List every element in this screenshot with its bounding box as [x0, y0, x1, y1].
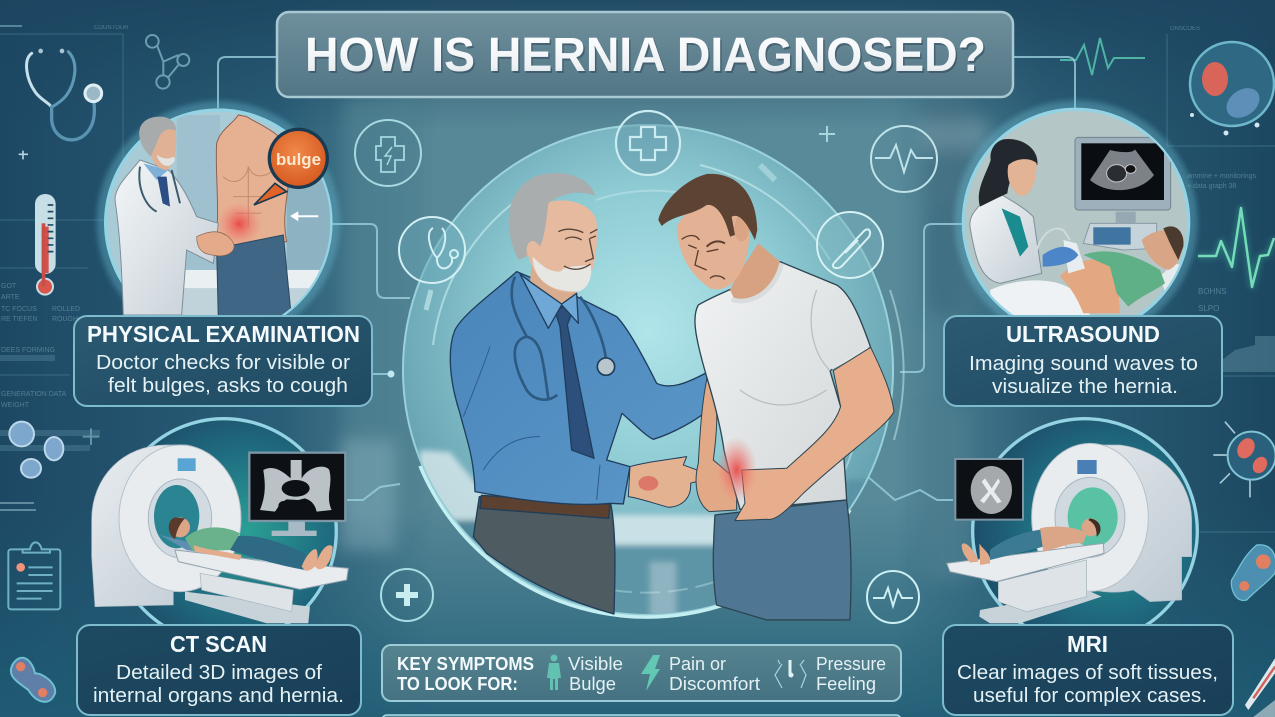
patient	[962, 518, 1101, 565]
patient left arm	[696, 377, 737, 512]
left background data panel: WEIGHT	[1, 402, 30, 409]
panel: mri	[943, 625, 1233, 715]
torso	[216, 115, 289, 247]
left background data panel: DEES FORMING	[1, 347, 55, 354]
left background data panel: COUNTOUR	[94, 25, 129, 31]
icon circle: plus	[381, 569, 433, 621]
sleeve and cuff folds	[463, 347, 600, 500]
patient jeans	[713, 500, 851, 620]
scanner front	[1032, 443, 1148, 591]
monitor	[1075, 137, 1171, 210]
panel: mri: useful for complex cases.	[973, 685, 1207, 707]
icon circle: medical cross with bolt	[355, 120, 421, 186]
panel: mri: Clear images of soft tissues,	[957, 662, 1218, 684]
icon: heartbeat right	[1198, 208, 1274, 287]
left background data panel: ROUGH	[52, 316, 78, 323]
doctor stethoscope	[512, 277, 606, 400]
console	[1083, 223, 1157, 250]
ultrasound circle	[954, 100, 1198, 344]
doctor shirt and tie	[143, 163, 168, 180]
patient figure	[658, 174, 894, 620]
icon: blood cells	[9, 422, 63, 478]
doctor head	[525, 200, 597, 293]
patient face features	[682, 235, 725, 279]
doctor face features	[558, 229, 597, 269]
jeans	[217, 235, 292, 320]
icon: lightning	[641, 655, 660, 691]
small plus marks	[819, 126, 835, 142]
doctor coat	[115, 160, 218, 315]
title banner	[277, 12, 1013, 97]
scanner screen	[1077, 460, 1097, 474]
icon: pressure	[775, 660, 806, 688]
speech bubble	[254, 128, 329, 205]
panel: key symptoms: Visible	[568, 654, 623, 674]
patient abdomen	[1060, 259, 1120, 313]
icon: bacterium right	[1231, 545, 1275, 601]
arrow	[290, 211, 318, 221]
central circular illustration	[355, 111, 937, 623]
physical examination circle	[97, 101, 340, 344]
panel: ultrasound: Imaging sound waves to	[969, 353, 1198, 375]
doctor beard	[533, 257, 591, 292]
icon circle: medical cross	[616, 111, 680, 175]
doctor hand	[197, 232, 234, 256]
right background data panel: ammine + monitorings	[1187, 173, 1257, 180]
nurse coat	[970, 192, 1042, 283]
doctor neck	[530, 263, 577, 305]
panel: ct scan: Detailed 3D images of	[116, 662, 322, 684]
icon circle: thermometer	[817, 212, 883, 278]
doctor hair	[509, 173, 595, 260]
left background data panel: TC FOCUS	[1, 306, 37, 313]
doctor tie	[555, 307, 594, 458]
panel: key symptoms: KEY SYMPTOMS	[397, 654, 534, 674]
left background data panel: ROLLED	[52, 306, 80, 313]
connector dot	[388, 370, 394, 378]
icon: plus lower left	[83, 428, 99, 445]
left background data panel: GOT	[1, 283, 17, 290]
connector lines	[218, 57, 1075, 500]
doctor collar	[520, 274, 578, 328]
panel: key symptoms: Bulge	[569, 674, 616, 694]
title banner: HOW IS HERNIA DIAGNOSED?	[305, 29, 986, 82]
patient head	[677, 200, 749, 289]
icon: thermometer lower right	[1245, 658, 1275, 717]
panel: key symptoms: Discomfort	[669, 674, 760, 694]
panel: ultrasound: ULTRASOUND	[1006, 321, 1160, 347]
scanner front	[119, 445, 241, 592]
right background data panel: + data graph 38	[1187, 183, 1236, 190]
panel: ct scan: internal organs and hernia.	[93, 685, 344, 707]
mri circle	[947, 419, 1197, 643]
patient right arm	[735, 347, 894, 521]
chest and abdominal lines	[223, 167, 273, 227]
stethoscope chest piece	[597, 358, 615, 375]
right background data panel: BOHNS	[1198, 287, 1226, 296]
hernia glow	[716, 437, 757, 503]
ring arcs	[403, 125, 904, 617]
monitor	[955, 459, 1023, 520]
panel: key symptoms: TO LOOK FOR:	[397, 674, 518, 694]
skin rash	[638, 476, 658, 491]
table	[175, 550, 348, 623]
doctor belt	[480, 495, 610, 518]
panel: physical examination: PHYSICAL EXAMINATION	[87, 321, 360, 347]
ct scan circle	[92, 419, 348, 643]
scanner bore	[148, 479, 212, 558]
t-shirt collar	[732, 263, 782, 301]
left background data panel: ARTE	[1, 294, 20, 301]
icon: clipboard	[8, 542, 60, 609]
panel: physical examination: Doctor checks for visible or	[96, 352, 350, 374]
panel: key symptoms: Pain or	[669, 654, 726, 674]
nurse face	[1008, 159, 1037, 196]
scanner body	[1040, 445, 1192, 602]
panel: ultrasound: visualize the hernia.	[992, 376, 1178, 398]
doctor shirt	[450, 272, 708, 504]
left background data panel	[0, 25, 129, 511]
scanner body	[92, 445, 240, 607]
panel: ct scan: CT SCAN	[170, 631, 267, 657]
icon circle: heartbeat	[871, 126, 937, 192]
icon: molecule	[146, 35, 189, 89]
icon circle: stethoscope	[399, 217, 465, 283]
patient t-shirt	[695, 262, 871, 509]
t-shirt folds	[740, 290, 868, 405]
right background data panel	[1167, 26, 1275, 532]
patient shirt	[1083, 251, 1165, 307]
bulge	[220, 205, 259, 243]
panel: physical examination	[74, 316, 372, 406]
doctor stethoscope	[139, 167, 180, 212]
probe cable	[1035, 229, 1070, 257]
blanket	[990, 280, 1090, 315]
scanner screen	[178, 458, 196, 471]
monitor	[249, 453, 345, 536]
nurse glove	[1043, 247, 1078, 267]
doctor trousers	[473, 497, 615, 614]
panel: physical examination: felt bulges, asks to cough	[108, 375, 348, 397]
doctor hand	[628, 457, 715, 507]
pillow	[1162, 264, 1180, 290]
panel: ct scan	[77, 625, 361, 715]
bulge label: bulge	[276, 150, 321, 169]
right background data panel: ONSCOES	[1170, 26, 1200, 32]
icon: plus left	[19, 151, 28, 159]
panel: key symptoms: Feeling	[816, 674, 876, 694]
patient neck	[730, 243, 780, 300]
doctor ear	[518, 236, 530, 257]
patient hair	[658, 174, 757, 240]
icon: bacterium left	[11, 658, 55, 702]
doctor figure	[450, 173, 715, 614]
left background data panel: GENERATION DATA	[1, 391, 67, 398]
icon: stethoscope	[27, 49, 102, 140]
title banner: HOW IS HERNIA DIAGNOSED?	[306, 31, 988, 84]
patient ear	[734, 215, 749, 242]
icon: person	[547, 654, 561, 690]
panel: mri: MRI	[1067, 631, 1108, 657]
nurse hair	[979, 139, 1037, 207]
doctor head	[147, 122, 176, 170]
icon: heartbeat top	[1060, 38, 1145, 75]
exam bed	[180, 270, 320, 288]
icon: cell culture top right	[1190, 42, 1274, 136]
table	[947, 543, 1104, 623]
right background data panel: SLPO	[1198, 304, 1219, 313]
panel: ultrasound	[944, 316, 1222, 406]
clinic backdrop	[400, 124, 895, 620]
scanner bore	[1055, 477, 1125, 557]
patient head	[1142, 230, 1183, 270]
curtain	[177, 115, 220, 282]
probe	[1063, 240, 1085, 273]
icon circle: ecg	[867, 571, 919, 623]
icon: virus right	[1213, 422, 1275, 497]
panel: key symptoms	[382, 645, 901, 717]
panel: key symptoms: Pressure	[816, 654, 886, 674]
left background data panel: RE TIEFEN	[1, 316, 37, 323]
icon: thermometer	[35, 194, 56, 295]
patient	[160, 517, 333, 571]
